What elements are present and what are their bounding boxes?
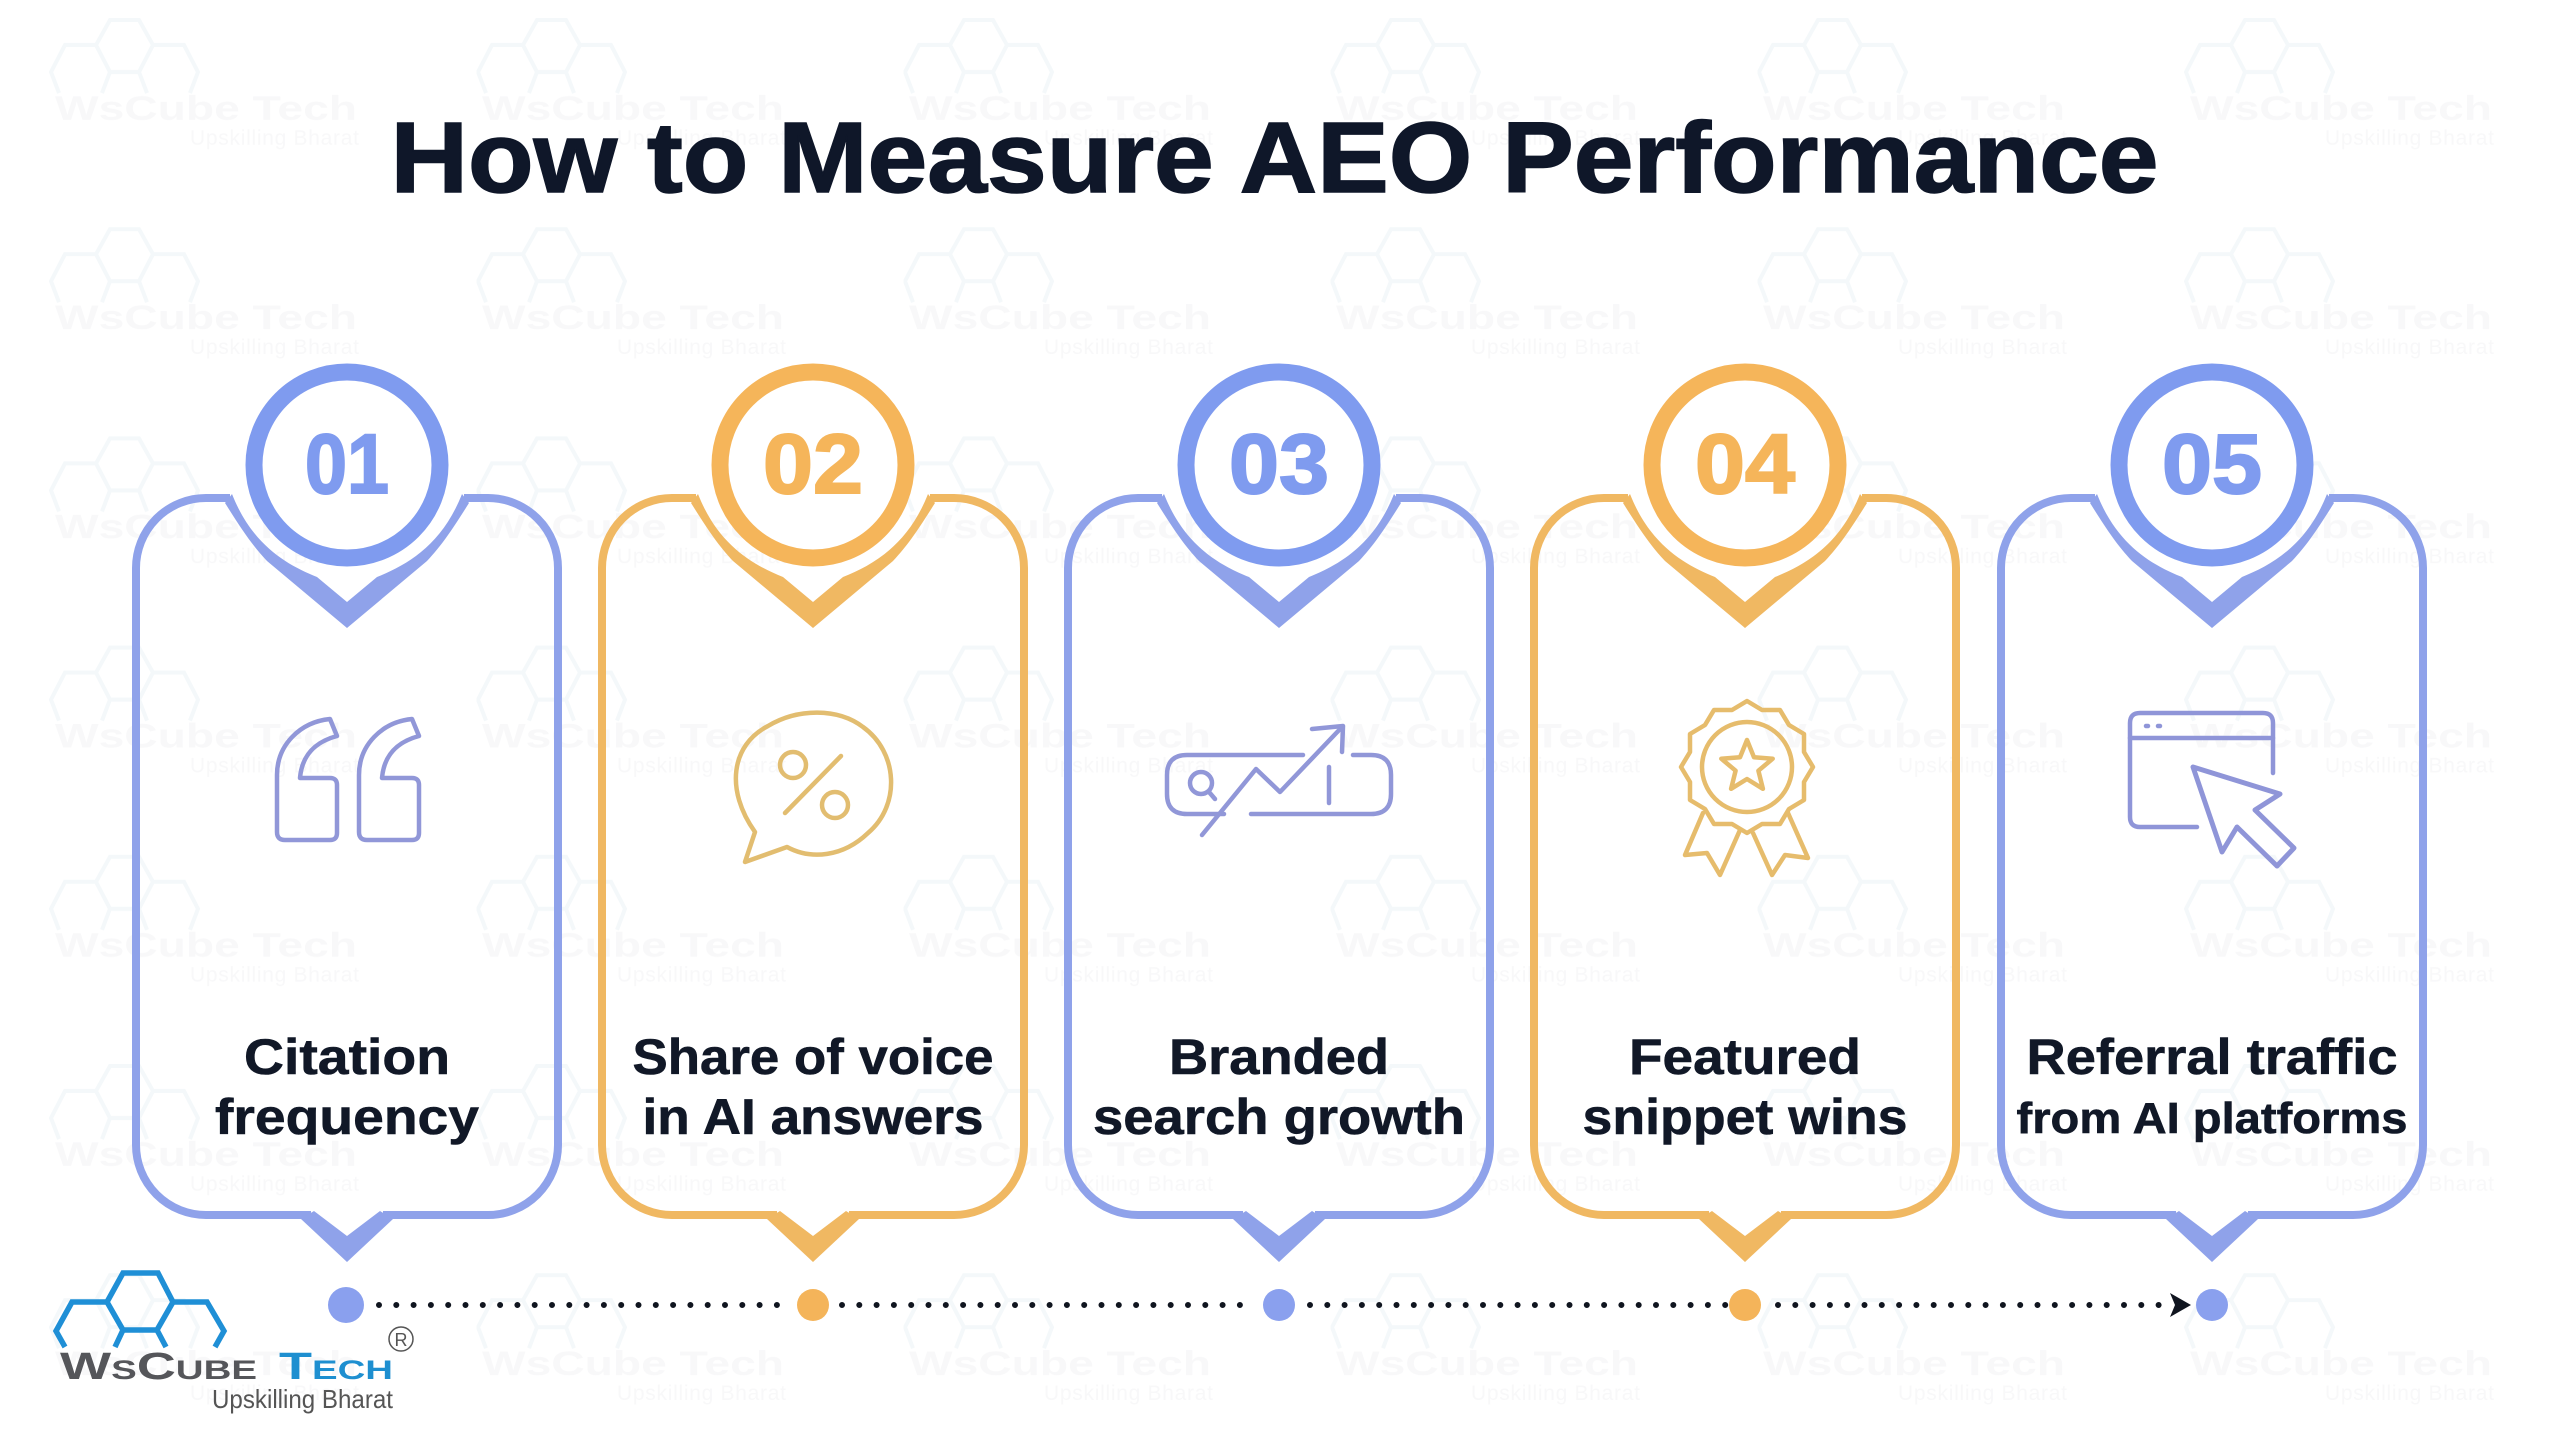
number badge 02: 02: [763, 417, 863, 511]
number badge 05: 05: [2162, 417, 2262, 511]
timeline: [328, 1287, 2228, 1323]
panel: referral traffic: [2001, 372, 2423, 1262]
label: [1582, 1029, 1908, 1145]
tagline: Upskilling Bharat: [212, 1384, 394, 1414]
icon: browser window with cursor: [2130, 713, 2294, 866]
label: [2016, 1029, 2408, 1143]
number badge 01: [254, 372, 440, 558]
icon: search bar with growth arrow: [1167, 726, 1391, 835]
label: snippet wins: [1582, 1089, 1908, 1145]
label: [1093, 1029, 1465, 1145]
timeline nodes: [328, 1287, 2228, 1323]
card outline: [1534, 494, 1956, 1262]
label: Featured: [1629, 1029, 1861, 1085]
label: [632, 1029, 994, 1145]
panel: branded search growth: [1068, 372, 1490, 1262]
registered mark: R: [394, 1330, 408, 1350]
label: Citation: [244, 1029, 450, 1085]
number badge 02: [720, 372, 906, 558]
wordmark: T ECH: [279, 1346, 393, 1388]
label: from AI platforms: [2016, 1094, 2408, 1143]
number badge 03: [1186, 372, 1372, 558]
registered mark: [389, 1327, 413, 1351]
panel: citation frequency: [136, 372, 558, 1262]
icon: hexagons: [56, 1273, 224, 1347]
panel: featured snippet wins: [1534, 372, 1956, 1262]
title: How to Measure AEO Performance: [390, 102, 2158, 214]
label: search growth: [1093, 1089, 1465, 1145]
icon: quotation marks: [277, 719, 419, 840]
wordmark: [60, 1346, 393, 1388]
number badge 04: 04: [1695, 417, 1795, 511]
label: [215, 1029, 479, 1145]
card outline: [602, 494, 1024, 1262]
icon: speech bubble with percent: [736, 713, 891, 862]
label: in AI answers: [642, 1089, 984, 1145]
wordmark: W SC UBE: [60, 1346, 257, 1388]
logo: WsCube Tech: [56, 1273, 413, 1414]
label: Share of voice: [632, 1029, 994, 1085]
number badge 01: 01: [305, 417, 389, 511]
number badge 03: 03: [1229, 417, 1329, 511]
label: frequency: [215, 1089, 479, 1145]
number badge 04: [1652, 372, 1838, 558]
panel: share of voice: [602, 372, 1024, 1262]
card outline: [2001, 494, 2423, 1262]
number badge 05: [2119, 372, 2305, 558]
label: Referral traffic: [2026, 1029, 2398, 1085]
card outline: [136, 494, 558, 1262]
label: Branded: [1169, 1029, 1389, 1085]
card outline: [1068, 494, 1490, 1262]
icon: award rosette: [1681, 701, 1813, 875]
arrow head: [2170, 1293, 2191, 1317]
